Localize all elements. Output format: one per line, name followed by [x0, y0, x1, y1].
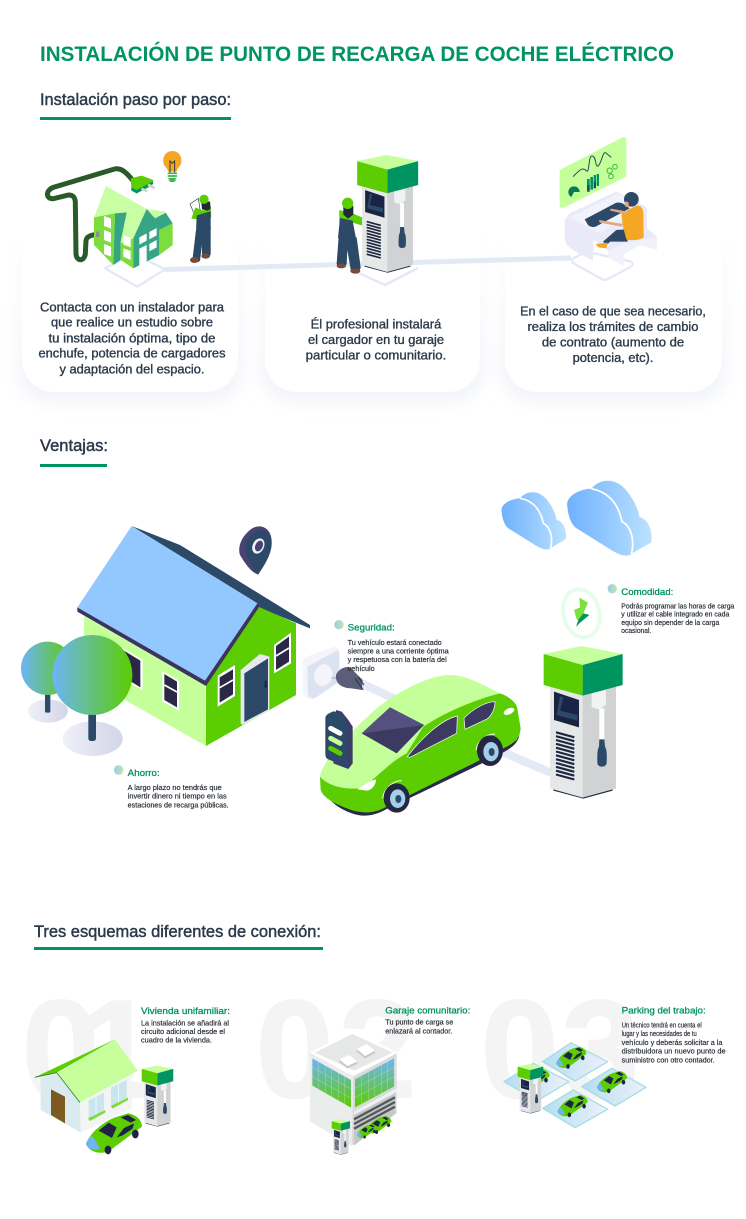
icon: person at desk with data panel: [560, 137, 657, 280]
text: garaje comunitario: enlazará al contador.: [385, 1028, 452, 1035]
cables from socket and charger to car: [362, 683, 551, 773]
icon: lightning bolt in ring: [558, 585, 605, 641]
text: step 1: y adaptación del espacio.: [60, 362, 205, 376]
text: parking del trabajo: Un técnico tendrá en cuenta el: [622, 1022, 702, 1029]
text: step 3: de contrato (aumento de: [542, 336, 684, 350]
tree small: [21, 642, 74, 723]
heading: ventajas: [40, 437, 108, 467]
text: parking del trabajo: Parking del trabajo:: [622, 1005, 706, 1016]
text: parking del trabajo: suministro con otro contador.: [622, 1057, 715, 1064]
callout: comodidad: y utilizar el cable integrado en cada: [621, 612, 729, 619]
callout: seguridad: [334, 620, 449, 673]
callout: seguridad: Seguridad:: [348, 623, 395, 634]
icon: worker with clipboard: [190, 195, 211, 263]
cloud left: [502, 492, 566, 549]
icon: battery: [325, 710, 353, 769]
big number 03: 03: [481, 972, 639, 1127]
panel: step 3 card: [499, 205, 728, 402]
icon: clouds: [502, 481, 652, 556]
panel: step 1 card: [16, 205, 244, 402]
icon: worker at charger: [337, 198, 365, 274]
text: step 2: el cargador en tu garaje: [308, 333, 444, 347]
callout: seguridad: Tu vehículo estará conectado: [348, 640, 442, 647]
callout: ahorro: invertir dinero ni tiempo en las: [128, 794, 227, 801]
scheme 1 illustration: house, charger, car: [35, 1039, 173, 1154]
panel: step 2 card: [259, 205, 486, 402]
callout: comodidad: [608, 584, 734, 635]
parking bays: [504, 1043, 646, 1128]
text: garaje comunitario: [385, 1005, 470, 1035]
text: step 1: enchufe, potencia de cargadores: [38, 347, 226, 361]
text: step 1: [38, 301, 226, 376]
heading: ventajas: Ventajas:: [40, 437, 108, 455]
scheme 3 illustration: parking, charger, cars: [504, 1043, 646, 1128]
text: step 1: tu instalación óptima, tipo de: [48, 331, 216, 345]
text: step 1: que realice un estudio sobre: [51, 316, 213, 330]
heading: tres esquemas: [34, 923, 323, 950]
callout: ahorro: estaciones de recarga públicas.: [128, 803, 229, 810]
text: step 3: [520, 305, 706, 365]
scheme 2 illustration: building, charger, cars: [310, 1031, 397, 1155]
text: vivienda unifamiliar: La instalación se añadirá al: [141, 1020, 229, 1028]
callout: ahorro: A largo plazo no tendrás que: [128, 785, 222, 792]
tree large: [52, 635, 132, 756]
text: vivienda unifamiliar: [141, 1006, 230, 1045]
heading: instalación paso por paso: [40, 91, 231, 120]
car: [320, 675, 521, 816]
callout: seguridad: vehículo: [348, 666, 375, 673]
heading: instalación paso por paso: Instalación paso por paso:: [40, 91, 231, 109]
callout: ahorro: Ahorro:: [128, 768, 160, 779]
cloud right: [567, 481, 652, 556]
text: vivienda unifamiliar: Vivienda unifamiliar:: [141, 1006, 230, 1017]
icon: house with plug and cable: [47, 169, 173, 287]
big number 01: 01: [22, 972, 156, 1127]
text: step 2: particular o comunitario.: [306, 348, 446, 362]
icon: wall socket and plug: [303, 647, 364, 699]
text: garaje comunitario: Tu punto de carga se: [385, 1020, 453, 1027]
house with trees: [21, 526, 310, 756]
icon: light bulb: [163, 151, 181, 182]
text: vivienda unifamiliar: cuadro de la vivienda.: [141, 1038, 212, 1045]
text: parking del trabajo: vehículo y deberás solicitar a la: [622, 1040, 722, 1047]
connector line between steps: [165, 258, 571, 285]
text: step 2: Él profesional instalará: [311, 316, 441, 331]
icon: charging station large: [544, 646, 623, 799]
icon: charging station step 2: [357, 155, 418, 273]
building: [310, 1031, 397, 1146]
title: INSTALACIÓN DE PUNTO DE RECARGA DE COCHE ELÉCTRICO: [40, 42, 674, 66]
callout: comodidad: Podrás programar las horas de carga: [621, 604, 734, 610]
callout: seguridad: siempre a una corriente óptima: [348, 648, 449, 656]
callout: ahorro: [114, 765, 229, 810]
text: step 3: potencia, etc).: [573, 351, 653, 365]
text: parking del trabajo: [622, 1005, 726, 1064]
text: step 2: [306, 316, 446, 362]
callout: comodidad: Comodidad:: [621, 587, 673, 598]
callout: comodidad: equipo sin depender de la carga: [621, 620, 719, 627]
text: step 3: realiza los trámites de cambio: [528, 320, 699, 334]
text: parking del trabajo: distribuidora un nuevo punto de: [622, 1049, 726, 1056]
small house: [35, 1039, 138, 1133]
text: parking del trabajo: lugar y las necesidades de tu: [622, 1031, 697, 1038]
callout: seguridad: y respetuosa con la batería del: [348, 657, 447, 664]
callout: comodidad: ocasional.: [621, 628, 651, 635]
heading: tres esquemas: Tres esquemas diferentes de conexión:: [34, 923, 321, 941]
text: vivienda unifamiliar: circuito adicional desde el: [141, 1029, 225, 1036]
icon: location pin: [239, 526, 272, 575]
big number 02: 02: [256, 972, 416, 1127]
text: step 3: En el caso de que sea necesario,: [520, 305, 706, 319]
text: step 1: Contacta con un instalador para: [40, 301, 224, 315]
text: garaje comunitario: Garaje comunitario:: [385, 1005, 470, 1016]
